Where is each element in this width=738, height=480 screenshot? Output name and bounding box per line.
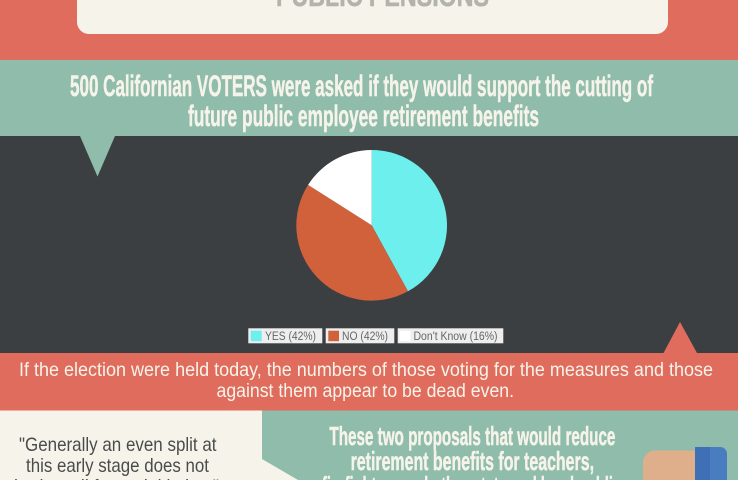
icon: speech pointer [80, 136, 115, 176]
legend item: no: NO (42%) [342, 331, 388, 343]
result statement text [19, 360, 713, 402]
pie slice: yes 42% [372, 150, 447, 291]
legend item: yes: YES (42%) [265, 331, 316, 343]
panel: result statement [0, 322, 738, 410]
pie chart [296, 150, 447, 301]
icon: folder [643, 447, 727, 480]
chart legend [248, 328, 503, 343]
panel: survey question [0, 60, 738, 176]
legend item: don't know [398, 328, 503, 343]
quote text: this early stage does not [26, 455, 209, 477]
proposals text: retirement benefits for teachers, [351, 446, 594, 476]
survey question text [70, 70, 654, 133]
title card [77, 0, 668, 34]
result statement text: against them appear to be dead even. [216, 381, 514, 402]
panel: chart background [0, 136, 738, 353]
legend item: don't know: Don't Know (16%) [414, 331, 498, 343]
panel: quote [0, 410, 262, 480]
proposals text [322, 421, 621, 480]
result statement text: If the election were held today, the numbers of those voting for the measures and those [19, 360, 713, 381]
legend item: no [326, 328, 394, 343]
pie slice: no 42% [296, 185, 408, 301]
panel: proposals [262, 410, 738, 480]
icon: speech pointer [664, 322, 697, 353]
quote text [14, 434, 219, 480]
panel: title banner [0, 0, 738, 60]
pie slice: don't know 16% [308, 150, 372, 225]
quote text: "Generally an even split at [19, 434, 217, 456]
legend item: yes [248, 328, 322, 343]
